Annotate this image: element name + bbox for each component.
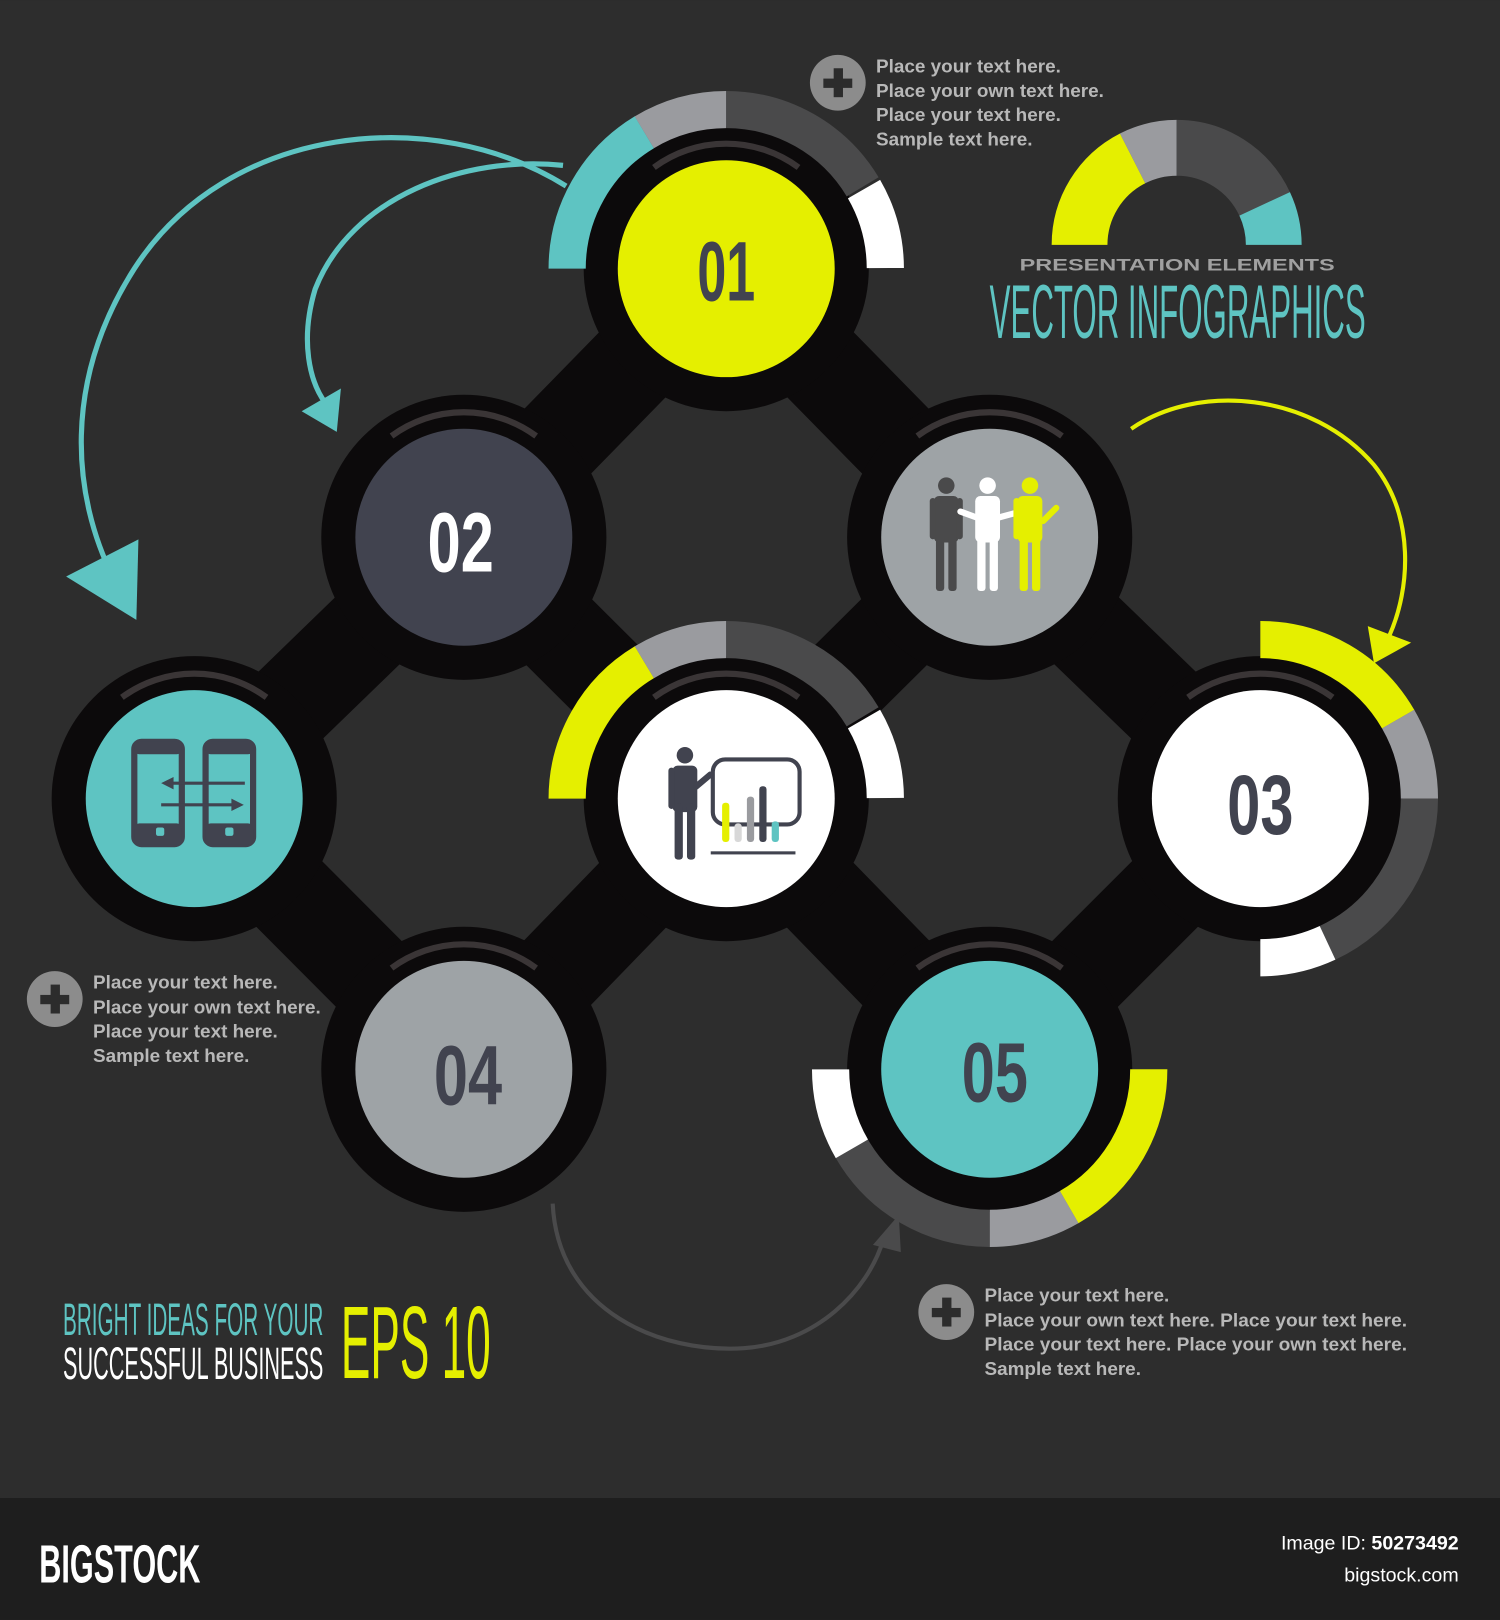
text block: bottom right: Sample text here. bbox=[985, 1359, 1141, 1380]
text block: bottom right: Place your own text here. Place your text here. bbox=[985, 1311, 1407, 1332]
ring: presentation progress bbox=[508, 580, 945, 1017]
text block: top bbox=[810, 55, 1104, 151]
icon: two phones exchanging bbox=[134, 742, 253, 844]
gauge: semicircle chart bbox=[1046, 114, 1307, 376]
heading: presentation elements: PRESENTATION ELEMENTS bbox=[1020, 256, 1335, 275]
footer bar bbox=[0, 1498, 1500, 1620]
text block: bottom right: Place your text here. Place your own text here. bbox=[985, 1334, 1407, 1355]
node: phones icon bbox=[86, 690, 303, 907]
arrow: gray bottom bbox=[553, 1204, 901, 1349]
node 01 bbox=[618, 160, 835, 377]
footer bar: bigstock.com bbox=[1344, 1565, 1459, 1587]
text block: left: Place your text here. bbox=[93, 973, 278, 994]
node 02 bbox=[355, 429, 572, 646]
logo: BIGSTOCK bbox=[39, 1535, 201, 1595]
node 05: 05 bbox=[962, 1024, 1028, 1119]
text: SUCCESSFUL BUSINESS bbox=[63, 1338, 323, 1389]
arrow: teal large bbox=[66, 138, 566, 620]
node: presentation icon bbox=[618, 690, 835, 907]
ring: step 01 progress bbox=[508, 50, 945, 487]
text block: top: Place your text here. bbox=[876, 56, 1061, 77]
icon: plus bbox=[918, 1284, 974, 1340]
text: EPS 10 bbox=[341, 1284, 491, 1400]
icon: plus bbox=[27, 971, 83, 1027]
text block: left: Sample text here. bbox=[93, 1046, 249, 1067]
icon: three people bbox=[930, 477, 1061, 591]
text block: top: Place your text here. bbox=[876, 105, 1061, 126]
text block: left bbox=[27, 971, 321, 1067]
arrow: teal small bbox=[302, 164, 563, 432]
node highlights bbox=[122, 144, 1333, 968]
text block: left: Place your text here. bbox=[93, 1021, 278, 1042]
text block: bottom right: Place your text here. bbox=[985, 1286, 1169, 1307]
node 04 bbox=[355, 961, 572, 1178]
ring: step 03 progress bbox=[1043, 581, 1478, 1016]
text block: top: Place your own text here. bbox=[876, 81, 1104, 102]
icon: presenter with chart bbox=[668, 747, 800, 860]
text block: left: Place your own text here. bbox=[93, 998, 321, 1019]
node 03 bbox=[1152, 690, 1369, 907]
node 01: 01 bbox=[697, 224, 755, 319]
ring: step 05 progress bbox=[772, 852, 1207, 1287]
node 04: 04 bbox=[434, 1027, 502, 1122]
tagline bbox=[63, 1294, 323, 1389]
node 05 bbox=[881, 961, 1098, 1178]
image id: Image ID: 50273492 bbox=[1281, 1533, 1459, 1555]
node: people icon bbox=[881, 429, 1098, 646]
text block: top: Sample text here. bbox=[876, 130, 1032, 151]
text: BRIGHT IDEAS FOR YOUR bbox=[63, 1294, 323, 1345]
arrow: yellow bbox=[1131, 401, 1411, 663]
node 03: 03 bbox=[1227, 757, 1293, 852]
network: black connected blob bbox=[52, 126, 1403, 1212]
text block: bottom right bbox=[918, 1284, 1407, 1380]
node 02: 02 bbox=[428, 494, 494, 589]
icon: plus bbox=[810, 55, 866, 111]
